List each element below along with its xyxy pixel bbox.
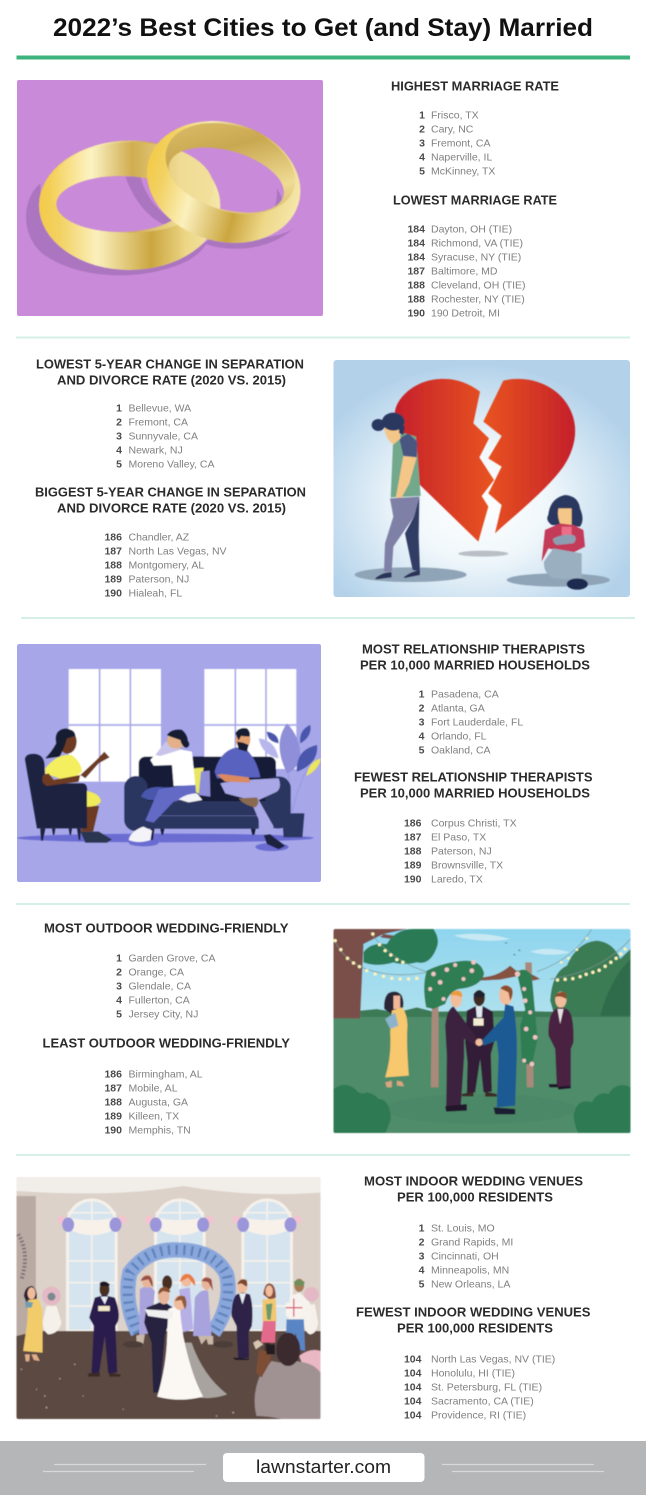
- illustration: wedding rings: [17, 80, 323, 316]
- list: lowest 5-year change: 2: [116, 417, 122, 429]
- list: most outdoor wedding-friendly: 4: [116, 995, 122, 1007]
- list: fewest indoor wedding venues: 104: [404, 1368, 422, 1380]
- list: fewest relationship therapists: El Paso, TX: [431, 832, 486, 844]
- list: lowest marriage rate: Rochester, NY (TIE): [431, 294, 525, 306]
- list: lowest 5-year change: 3: [116, 431, 122, 443]
- list: lowest marriage rate: 184: [407, 238, 425, 250]
- groom right: [482, 985, 517, 1114]
- list: most relationship therapists: 4: [419, 731, 425, 743]
- list: lowest 5-year change: 5: [116, 459, 122, 471]
- guest in yellow: [23, 1286, 42, 1361]
- list: lowest 5-year change: Bellevue, WA: [128, 403, 191, 415]
- list: most outdoor wedding-friendly: Jersey City, NJ: [128, 1009, 198, 1021]
- floor: [16, 1331, 320, 1420]
- floral arch: [128, 1250, 228, 1333]
- list: most outdoor wedding-friendly: 5: [116, 1009, 122, 1021]
- list: biggest 5-year change: Montgomery, AL: [128, 560, 204, 572]
- list: fewest indoor wedding venues: St. Petersburg, FL (TIE): [431, 1382, 542, 1394]
- list: most outdoor wedding-friendly: Glendale, CA: [128, 981, 191, 993]
- list: least outdoor wedding-friendly: [104, 1069, 203, 1137]
- man with gift: [286, 1279, 310, 1351]
- list: most indoor wedding venues: 1: [419, 1223, 425, 1235]
- plant: [259, 723, 321, 837]
- list: biggest 5-year change: 186: [104, 532, 122, 544]
- list: lowest marriage rate: 184: [407, 252, 425, 264]
- windows: [69, 669, 296, 782]
- list: fewest indoor wedding venues: Sacramento, CA (TIE): [431, 1396, 534, 1408]
- list: lowest marriage rate: 187: [407, 266, 425, 278]
- list: lowest marriage rate: [407, 224, 526, 320]
- list: most indoor wedding venues: Cincinnati, OH: [431, 1251, 499, 1263]
- heart: [395, 379, 575, 542]
- illustration: broken heart: [334, 360, 630, 597]
- list: least outdoor wedding-friendly: 190: [104, 1125, 122, 1137]
- groomsman: [548, 992, 574, 1090]
- heading: fewest indoor wedding venues: [356, 1304, 591, 1336]
- list: most outdoor wedding-friendly: 3: [116, 981, 122, 993]
- list: most relationship therapists: Atlanta, GA: [431, 703, 485, 715]
- list: most outdoor wedding-friendly: 2: [116, 967, 122, 979]
- heading: most relationship therapists: PER 10,000 MARRIED HOUSEHOLDS: [360, 658, 590, 672]
- list: highest marriage rate: 1: [419, 110, 425, 122]
- list: biggest 5-year change: 189: [104, 574, 122, 586]
- list: least outdoor wedding-friendly: 187: [104, 1083, 122, 1095]
- heading: lowest marriage rate: LOWEST MARRIAGE RATE: [393, 192, 557, 208]
- list: biggest 5-year change: Chandler, AZ: [128, 532, 190, 544]
- list: fewest relationship therapists: 186: [404, 818, 422, 830]
- list: fewest indoor wedding venues: 104: [404, 1382, 422, 1394]
- list: most outdoor wedding-friendly: Orange, CA: [128, 967, 184, 979]
- list: most indoor wedding venues: St. Louis, MO: [431, 1223, 495, 1235]
- list: lowest marriage rate: 184: [407, 224, 425, 236]
- list: lowest marriage rate: Cleveland, OH (TIE): [431, 280, 526, 292]
- heading: most outdoor wedding-friendly: MOST OUTDOOR WEDDING-FRIENDLY: [44, 920, 289, 936]
- list: most indoor wedding venues: Minneapolis, MN: [431, 1265, 509, 1277]
- list: most indoor wedding venues: 4: [419, 1265, 425, 1277]
- list: least outdoor wedding-friendly: Memphis, TN: [128, 1125, 191, 1137]
- woman on sofa: [129, 730, 202, 842]
- list: fewest indoor wedding venues: Providence, RI (TIE): [431, 1410, 526, 1422]
- photographer: [253, 1333, 320, 1420]
- list: highest marriage rate: Naperville, IL: [431, 152, 492, 164]
- list: most relationship therapists: [419, 689, 523, 757]
- footer: [0, 1441, 646, 1495]
- list: fewest relationship therapists: Brownsville, TX: [431, 860, 503, 872]
- heading: lowest 5-year change: LOWEST 5-YEAR CHANGE IN SEPARATION: [36, 356, 304, 372]
- heading: fewest relationship therapists: PER 10,000 MARRIED HOUSEHOLDS: [360, 786, 590, 800]
- groom: [144, 1287, 173, 1393]
- list: fewest relationship therapists: Laredo, TX: [431, 874, 483, 886]
- list: fewest relationship therapists: Corpus Christi, TX: [431, 818, 517, 830]
- list: most relationship therapists: 2: [419, 703, 425, 715]
- list: fewest indoor wedding venues: 104: [404, 1354, 422, 1366]
- bridesmaids: [123, 1273, 233, 1348]
- list: highest marriage rate: 3: [419, 138, 425, 150]
- armchair and therapist: [25, 729, 112, 843]
- list: most relationship therapists: 1: [419, 689, 425, 701]
- list: most relationship therapists: Oakland, CA: [431, 745, 491, 757]
- list: fewest relationship therapists: 187: [404, 832, 422, 844]
- guest in yellow dress: [384, 991, 409, 1087]
- list: most indoor wedding venues: 5: [419, 1279, 425, 1291]
- heading: least outdoor wedding-friendly: LEAST OUTDOOR WEDDING-FRIENDLY: [42, 1036, 290, 1050]
- list: highest marriage rate: 4: [419, 152, 425, 164]
- heading: most indoor wedding venues: MOST INDOOR WEDDING VENUES: [364, 1174, 583, 1188]
- section: separation and divorce: [35, 356, 630, 600]
- heading: most indoor wedding venues: PER 100,000 RESIDENTS: [397, 1190, 553, 1204]
- list: lowest marriage rate: 190 Detroit, MI: [431, 308, 500, 320]
- list: most indoor wedding venues: 2: [419, 1237, 425, 1249]
- heading: most relationship therapists: [360, 642, 590, 672]
- list: most outdoor wedding-friendly: [116, 953, 215, 1021]
- list: most indoor wedding venues: New Orleans, LA: [431, 1279, 510, 1291]
- list: least outdoor wedding-friendly: Mobile, AL: [128, 1083, 178, 1095]
- illustration: outdoor wedding: [334, 929, 630, 1133]
- list: most outdoor wedding-friendly: Garden Grove, CA: [128, 953, 215, 965]
- list: biggest 5-year change: 188: [104, 560, 122, 572]
- list: lowest 5-year change: Sunnyvale, CA: [128, 431, 198, 443]
- string lights: [334, 929, 630, 982]
- heading: fewest indoor wedding venues: FEWEST INDOOR WEDDING VENUES: [356, 1304, 591, 1320]
- list: most outdoor wedding-friendly: 1: [116, 953, 122, 965]
- list: fewest indoor wedding venues: Honolulu, HI (TIE): [431, 1368, 515, 1380]
- tree: [334, 929, 438, 1018]
- confetti: [21, 1363, 234, 1417]
- heading: biggest 5-year change: BIGGEST 5-YEAR CHANGE IN SEPARATION: [35, 484, 306, 500]
- list: fewest relationship therapists: [404, 818, 517, 886]
- list: biggest 5-year change: 187: [104, 546, 122, 558]
- woman in pink: [261, 1283, 276, 1351]
- heading: fewest relationship therapists: [354, 770, 593, 800]
- hanging flowers: [18, 1234, 25, 1279]
- grass: [334, 1017, 630, 1133]
- list: most indoor wedding venues: 3: [419, 1251, 425, 1263]
- list: biggest 5-year change: [104, 532, 227, 600]
- list: lowest marriage rate: Syracuse, NY (TIE): [431, 252, 521, 264]
- section: relationship therapists: [17, 642, 593, 886]
- list: most relationship therapists: 5: [419, 745, 425, 757]
- woman: [507, 495, 610, 590]
- list: highest marriage rate: McKinney, TX: [431, 166, 495, 178]
- list: most relationship therapists: Orlando, FL: [431, 731, 487, 743]
- list: most relationship therapists: Fort Lauderdale, FL: [431, 717, 523, 729]
- background trees: [360, 941, 630, 1018]
- list: lowest 5-year change: Moreno Valley, CA: [128, 459, 214, 471]
- list: highest marriage rate: Cary, NC: [431, 124, 474, 136]
- list: fewest relationship therapists: 188: [404, 846, 422, 858]
- list: most outdoor wedding-friendly: Fullerton, CA: [128, 995, 190, 1007]
- list: least outdoor wedding-friendly: 186: [104, 1069, 122, 1081]
- section: indoor venues: [16, 1174, 591, 1422]
- illustration: indoor wedding: [16, 1176, 320, 1420]
- heading: fewest indoor wedding venues: PER 100,000 RESIDENTS: [397, 1320, 553, 1336]
- heading: biggest 5-year change: AND DIVORCE RATE (2020 VS. 2015): [57, 500, 286, 516]
- flower arch: [424, 960, 540, 1087]
- list: highest marriage rate: 5: [419, 166, 425, 178]
- list: highest marriage rate: Fremont, CA: [431, 138, 491, 150]
- heading: most indoor wedding venues: [364, 1174, 583, 1204]
- section: marriage rate: [17, 78, 559, 320]
- ring: left: [39, 141, 220, 270]
- man on sofa: [215, 728, 285, 849]
- list: biggest 5-year change: Paterson, NJ: [128, 574, 189, 586]
- list: biggest 5-year change: North Las Vegas, NV: [128, 546, 227, 558]
- groom left: [445, 991, 483, 1112]
- sofa: [124, 757, 291, 840]
- list: lowest marriage rate: 190: [407, 308, 425, 320]
- officiant: [462, 990, 497, 1097]
- list: highest marriage rate: 2: [419, 124, 425, 136]
- footer url: lawnstarter.com: [256, 1457, 391, 1477]
- list: fewest indoor wedding venues: North Las Vegas, NV (TIE): [431, 1354, 555, 1366]
- list: least outdoor wedding-friendly: Birmingham, AL: [128, 1069, 203, 1081]
- bride: [145, 1295, 227, 1400]
- list: lowest 5-year change: Fremont, CA: [128, 417, 188, 429]
- list: least outdoor wedding-friendly: Augusta, GA: [128, 1097, 188, 1109]
- list: fewest indoor wedding venues: 104: [404, 1396, 422, 1408]
- ring: right: [146, 120, 301, 244]
- list: least outdoor wedding-friendly: Killeen, TX: [128, 1111, 179, 1123]
- list: least outdoor wedding-friendly: 188: [104, 1097, 122, 1109]
- vases and bouquets: [42, 1287, 319, 1334]
- section: outdoor weddings: [42, 920, 630, 1137]
- list: least outdoor wedding-friendly: 189: [104, 1111, 122, 1123]
- list: fewest relationship therapists: Paterson, NJ: [431, 846, 492, 858]
- list: biggest 5-year change: Hialeah, FL: [128, 588, 182, 600]
- list: lowest marriage rate: Baltimore, MD: [431, 266, 498, 278]
- list: fewest indoor wedding venues: 104: [404, 1410, 422, 1422]
- list: lowest marriage rate: 188: [407, 280, 425, 292]
- list: biggest 5-year change: 190: [104, 588, 122, 600]
- heading: lowest 5-year change: [36, 356, 304, 388]
- heading: most relationship therapists: MOST RELATIONSHIP THERAPISTS: [362, 642, 585, 656]
- heading: biggest 5-year change: [35, 484, 306, 516]
- officiant: [88, 1281, 120, 1377]
- title: 2022’s Best Cities to Get (and Stay) Married: [53, 14, 593, 42]
- list: most indoor wedding venues: [419, 1223, 513, 1291]
- illustration: therapy session: [17, 644, 321, 882]
- list: lowest marriage rate: Richmond, VA (TIE): [431, 238, 523, 250]
- drapes: [16, 1176, 320, 1194]
- heading: highest marriage rate: HIGHEST MARRIAGE RATE: [391, 78, 559, 94]
- heading: lowest 5-year change: AND DIVORCE RATE (2020 VS. 2015): [57, 372, 286, 388]
- list: most relationship therapists: 3: [419, 717, 425, 729]
- list: lowest marriage rate: Dayton, OH (TIE): [431, 224, 512, 236]
- bushes: [334, 1085, 630, 1133]
- list: fewest relationship therapists: 190: [404, 874, 422, 886]
- man: [355, 413, 467, 582]
- list: highest marriage rate: [419, 110, 495, 178]
- list: highest marriage rate: Frisco, TX: [431, 110, 479, 122]
- list: lowest marriage rate: 188: [407, 294, 425, 306]
- windows: [57, 1200, 301, 1331]
- man in suit: [231, 1279, 252, 1360]
- list: fewest indoor wedding venues: [404, 1354, 555, 1422]
- list: most indoor wedding venues: Grand Rapids, MI: [431, 1237, 513, 1249]
- list: most relationship therapists: Pasadena, CA: [431, 689, 499, 701]
- list: lowest 5-year change: 1: [116, 403, 122, 415]
- list: lowest 5-year change: [116, 403, 214, 471]
- list: fewest relationship therapists: 189: [404, 860, 422, 872]
- list: lowest 5-year change: Newark, NJ: [128, 445, 183, 457]
- heading: fewest relationship therapists: FEWEST RELATIONSHIP THERAPISTS: [354, 770, 593, 784]
- list: lowest 5-year change: 4: [116, 445, 122, 457]
